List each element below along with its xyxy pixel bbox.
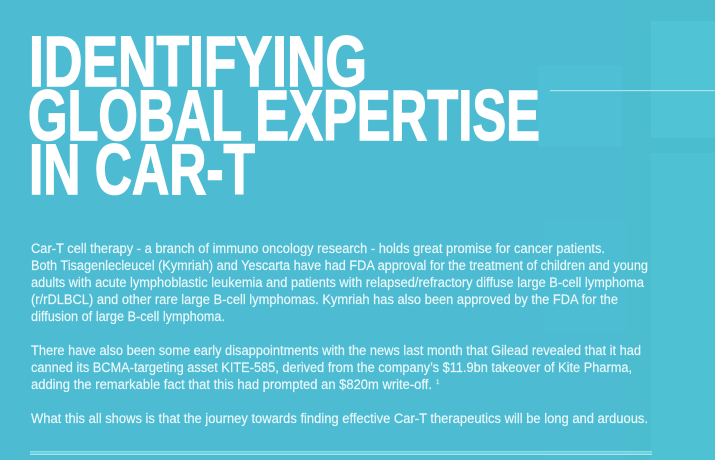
paragraph 1: (r/rDLBCL) and other rare large B-cell lymphomas. Kymriah has also been approved by the FDA for the [31,292,618,307]
paragraph 2: canned its BCMA-targeting asset KITE-585, derived from the company’s $11.9bn takeover of Kite Pharma, [31,360,632,375]
bottom double rule [30,451,652,455]
title: IDENTIFYING [29,23,367,102]
paragraph 1: Car-T cell therapy - a branch of immuno oncology research - holds great promise for cancer patients. [31,241,605,256]
paragraph 1 [31,241,648,324]
body text [31,241,648,426]
paragraph 2: adding the remarkable fact that this had prompted an $820m write-off. [31,377,432,392]
title: IN CAR-T [29,131,255,210]
paragraph 1: Both Tisagenlecleucel (Kymriah) and Yescarta have had FDA approval for the treatment of children and young [31,258,648,273]
paragraph 2 [31,343,641,392]
title [28,23,540,210]
paragraph 2: 1 [436,380,440,386]
paragraph 2: There have also been some early disappointments with the news last month that Gilead revealed that it had [31,343,641,358]
paragraph 1: diffusion of large B-cell lymphoma. [31,309,225,324]
paragraph 3: What this all shows is that the journey towards finding effective Car-T therapeutics will be long and arduous. [31,411,648,426]
paragraph 1: adults with acute lymphoblastic leukemia and patients with relapsed/refractory diffuse large B-cell lymphoma [31,275,645,290]
title rule [550,90,715,91]
